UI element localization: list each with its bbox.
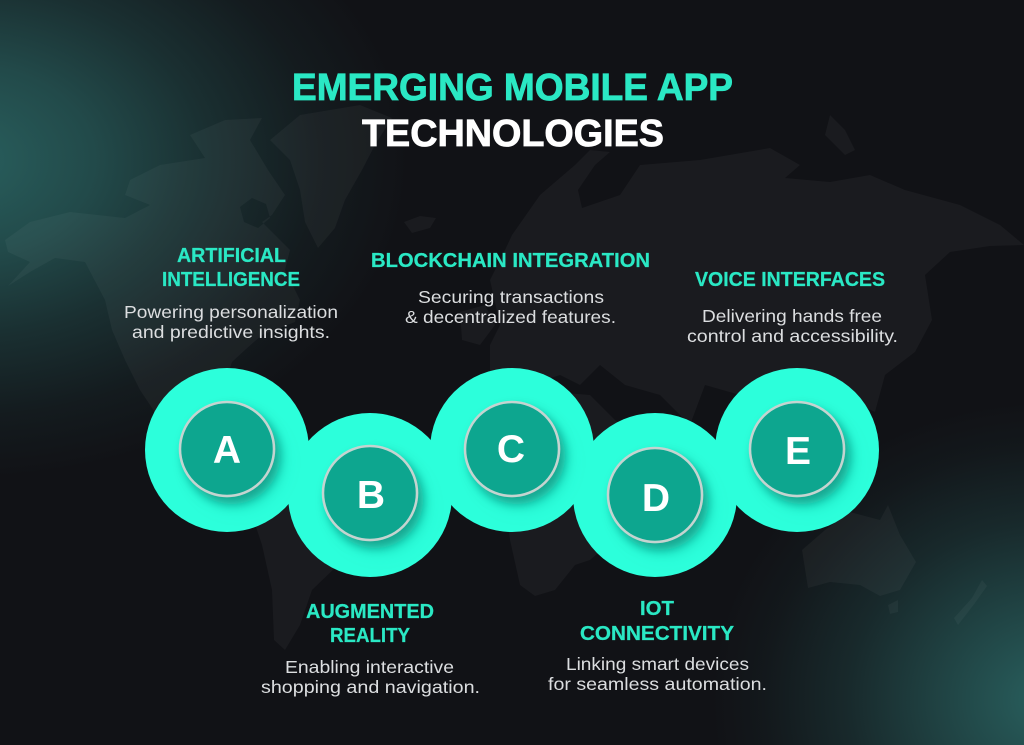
text block: augmented reality — [261, 601, 480, 697]
outer circle C — [430, 368, 594, 532]
text block: artificial intelligence: and predictive insights. — [132, 322, 330, 342]
badge A: A — [213, 429, 241, 472]
text block: augmented reality: Enabling interactive — [285, 657, 454, 677]
text block: artificial intelligence — [124, 245, 338, 342]
badge C: C — [497, 428, 525, 471]
title — [292, 67, 733, 155]
outer circle A — [145, 368, 309, 532]
outer circle E — [715, 368, 879, 532]
world map silhouette — [5, 105, 1024, 650]
badge B: B — [357, 474, 385, 517]
title: EMERGING MOBILE APP — [292, 67, 733, 109]
text block: blockchain integration: Securing transactions — [418, 287, 604, 307]
text block: artificial intelligence: ARTIFICIAL — [177, 245, 286, 267]
text block: iot connectivity: for seamless automation. — [548, 674, 767, 694]
badge D: D — [642, 477, 670, 520]
title: TECHNOLOGIES — [362, 113, 664, 155]
outer circle B — [288, 413, 452, 577]
connected circles chain — [145, 368, 879, 577]
badge D — [608, 448, 702, 542]
text block: iot connectivity: IOT — [640, 598, 674, 620]
text block: blockchain integration — [371, 250, 650, 327]
text block: voice interfaces: Delivering hands free — [702, 306, 882, 326]
text block: iot connectivity — [548, 598, 767, 694]
text block: artificial intelligence: INTELLIGENCE — [162, 269, 300, 291]
badge B — [323, 446, 417, 540]
text block: iot connectivity: Linking smart devices — [566, 654, 749, 674]
text block: artificial intelligence: Powering personalization — [124, 302, 338, 322]
badge E — [750, 402, 844, 496]
text block: voice interfaces: control and accessibility. — [687, 326, 898, 346]
text block: voice interfaces — [687, 269, 898, 346]
text block: augmented reality: shopping and navigation. — [261, 677, 480, 697]
text block: augmented reality: AUGMENTED — [306, 601, 434, 623]
text block: blockchain integration: & decentralized features. — [405, 307, 616, 327]
badge C — [465, 402, 559, 496]
badge E: E — [785, 430, 811, 473]
text block: iot connectivity: CONNECTIVITY — [580, 623, 735, 645]
text block: voice interfaces: VOICE INTERFACES — [695, 269, 885, 291]
outer circle D — [573, 413, 737, 577]
badge A — [180, 402, 274, 496]
text block: augmented reality: REALITY — [330, 625, 411, 647]
text block: blockchain integration: BLOCKCHAIN INTEGRATION — [371, 250, 650, 272]
